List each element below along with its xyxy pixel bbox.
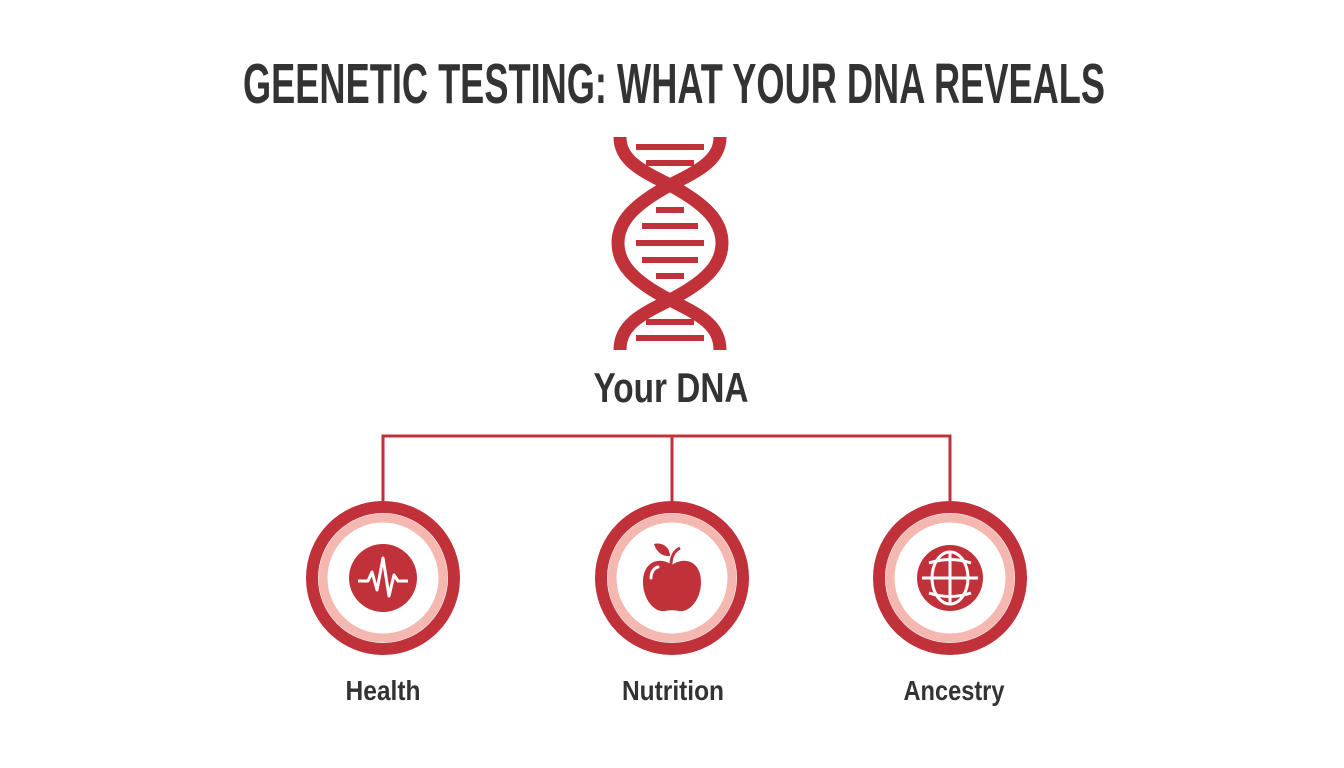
connector lines	[383, 436, 950, 501]
icon: heartbeat	[349, 544, 417, 612]
node: Nutrition	[601, 507, 743, 706]
node: Health	[312, 507, 454, 706]
icon: globe	[917, 545, 983, 611]
label: Ancestry: Ancestry	[904, 675, 1005, 706]
label: Nutrition: Nutrition	[622, 675, 724, 706]
icon: apple	[643, 544, 701, 611]
node: Ancestry	[879, 507, 1021, 706]
label: Health: Health	[346, 675, 420, 706]
heading: Your DNA: Your DNA	[594, 364, 748, 411]
icon: DNA helix	[618, 137, 722, 350]
